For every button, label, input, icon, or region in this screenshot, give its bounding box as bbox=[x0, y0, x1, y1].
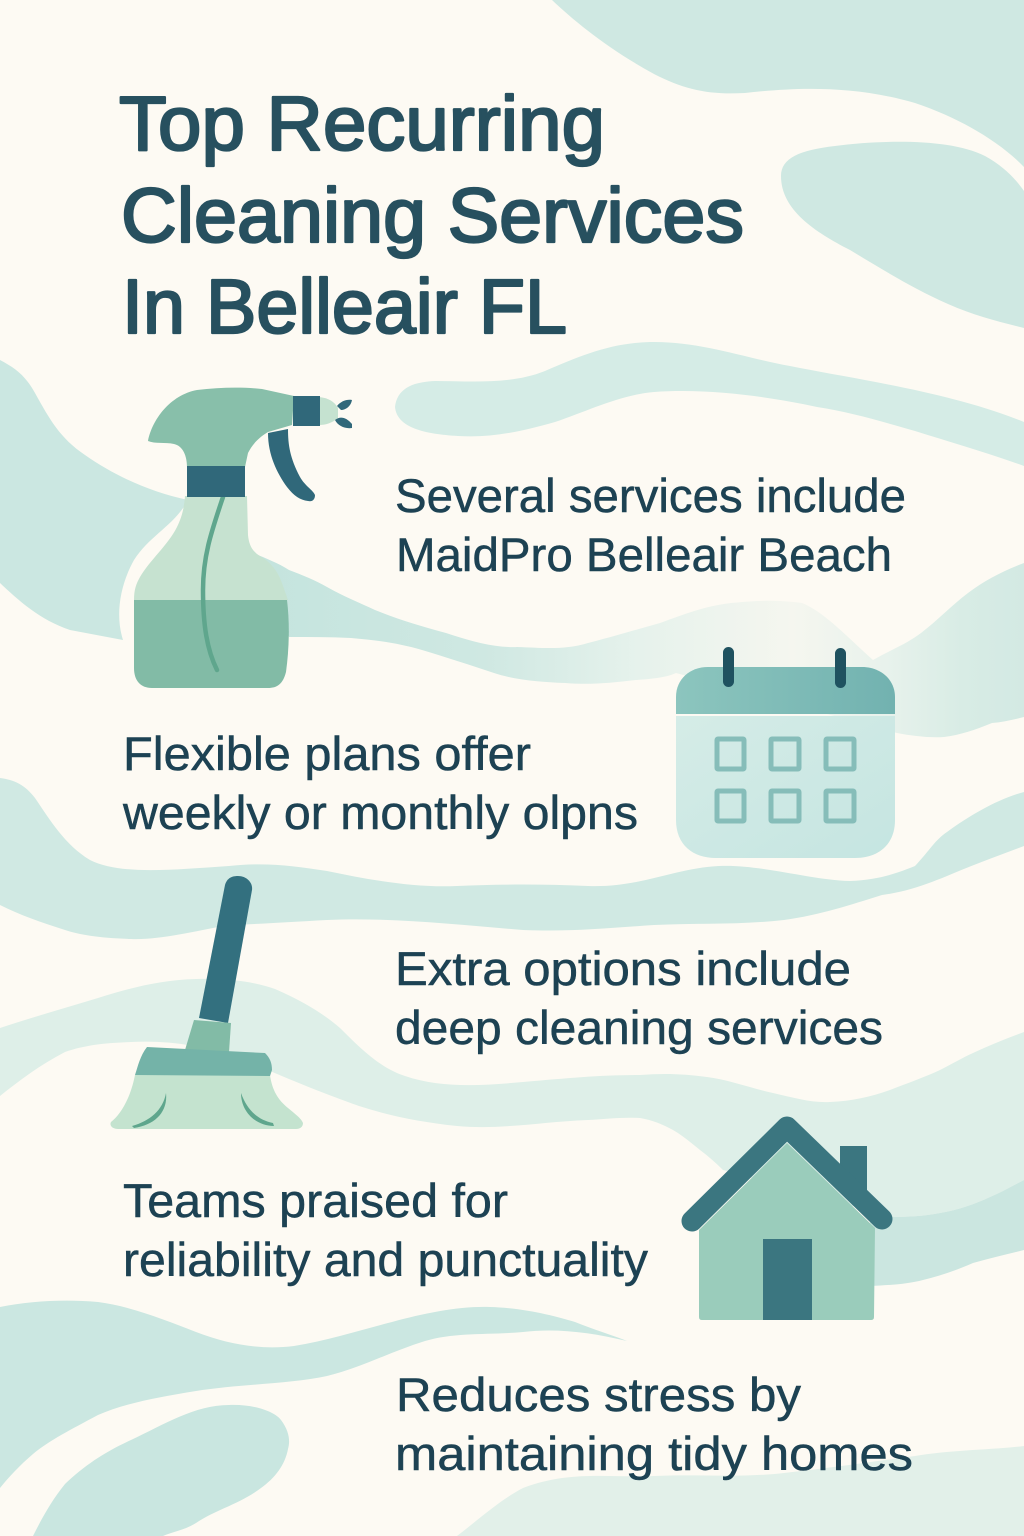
text: services bbox=[395, 469, 906, 581]
chimney bbox=[840, 1146, 867, 1200]
roof bbox=[692, 1127, 882, 1221]
text: extra options: deep cleaning services bbox=[395, 1001, 883, 1054]
text: services: MaidPro Belleair Beach bbox=[396, 528, 892, 581]
broom head bbox=[135, 1047, 272, 1076]
title: Top Recurring bbox=[119, 81, 605, 167]
text: flexible plans: weekly or monthly olpns bbox=[122, 786, 638, 839]
text: services: Several services include bbox=[395, 469, 906, 522]
title: In Belleair FL bbox=[122, 264, 567, 350]
text: extra options bbox=[395, 942, 883, 1054]
broom neck bbox=[185, 1020, 231, 1052]
text: flexible plans bbox=[122, 727, 638, 839]
text: teams: reliability and punctuality bbox=[123, 1233, 649, 1286]
broom bristles bbox=[110, 1075, 303, 1129]
text: extra options: Extra options include bbox=[395, 942, 851, 995]
bottle upper body bbox=[134, 496, 288, 600]
icon: spray bottle bbox=[134, 388, 352, 688]
nozzle bbox=[319, 397, 338, 425]
bottle liquid bbox=[134, 600, 289, 688]
broom handle bbox=[199, 876, 252, 1023]
trigger bbox=[268, 429, 315, 501]
binder rings bbox=[723, 647, 846, 688]
mid band merging into right-hand wave bbox=[253, 553, 1024, 737]
bristle accents bbox=[132, 1093, 274, 1128]
spray droplets bbox=[335, 400, 352, 428]
calendar header bbox=[676, 667, 895, 714]
door bbox=[763, 1239, 812, 1320]
icon: calendar bbox=[676, 647, 895, 858]
collar bbox=[187, 466, 245, 497]
icon: house bbox=[692, 1127, 882, 1320]
text: flexible plans: Flexible plans offer bbox=[123, 727, 531, 780]
text: reduces stress: Reduces stress by bbox=[396, 1368, 802, 1421]
text: teams bbox=[123, 1174, 649, 1286]
title bbox=[119, 81, 744, 350]
title: Cleaning Services bbox=[121, 173, 744, 259]
icon: broom bbox=[110, 876, 303, 1129]
text: reduces stress bbox=[395, 1368, 913, 1480]
text: reduces stress: maintaining tidy homes bbox=[395, 1427, 913, 1480]
text: teams: Teams praised for bbox=[123, 1174, 508, 1227]
house walls bbox=[699, 1143, 875, 1320]
date squares bbox=[717, 739, 854, 821]
calendar body bbox=[676, 716, 895, 858]
sprayer head bbox=[148, 388, 294, 467]
dip tube bbox=[203, 497, 223, 670]
